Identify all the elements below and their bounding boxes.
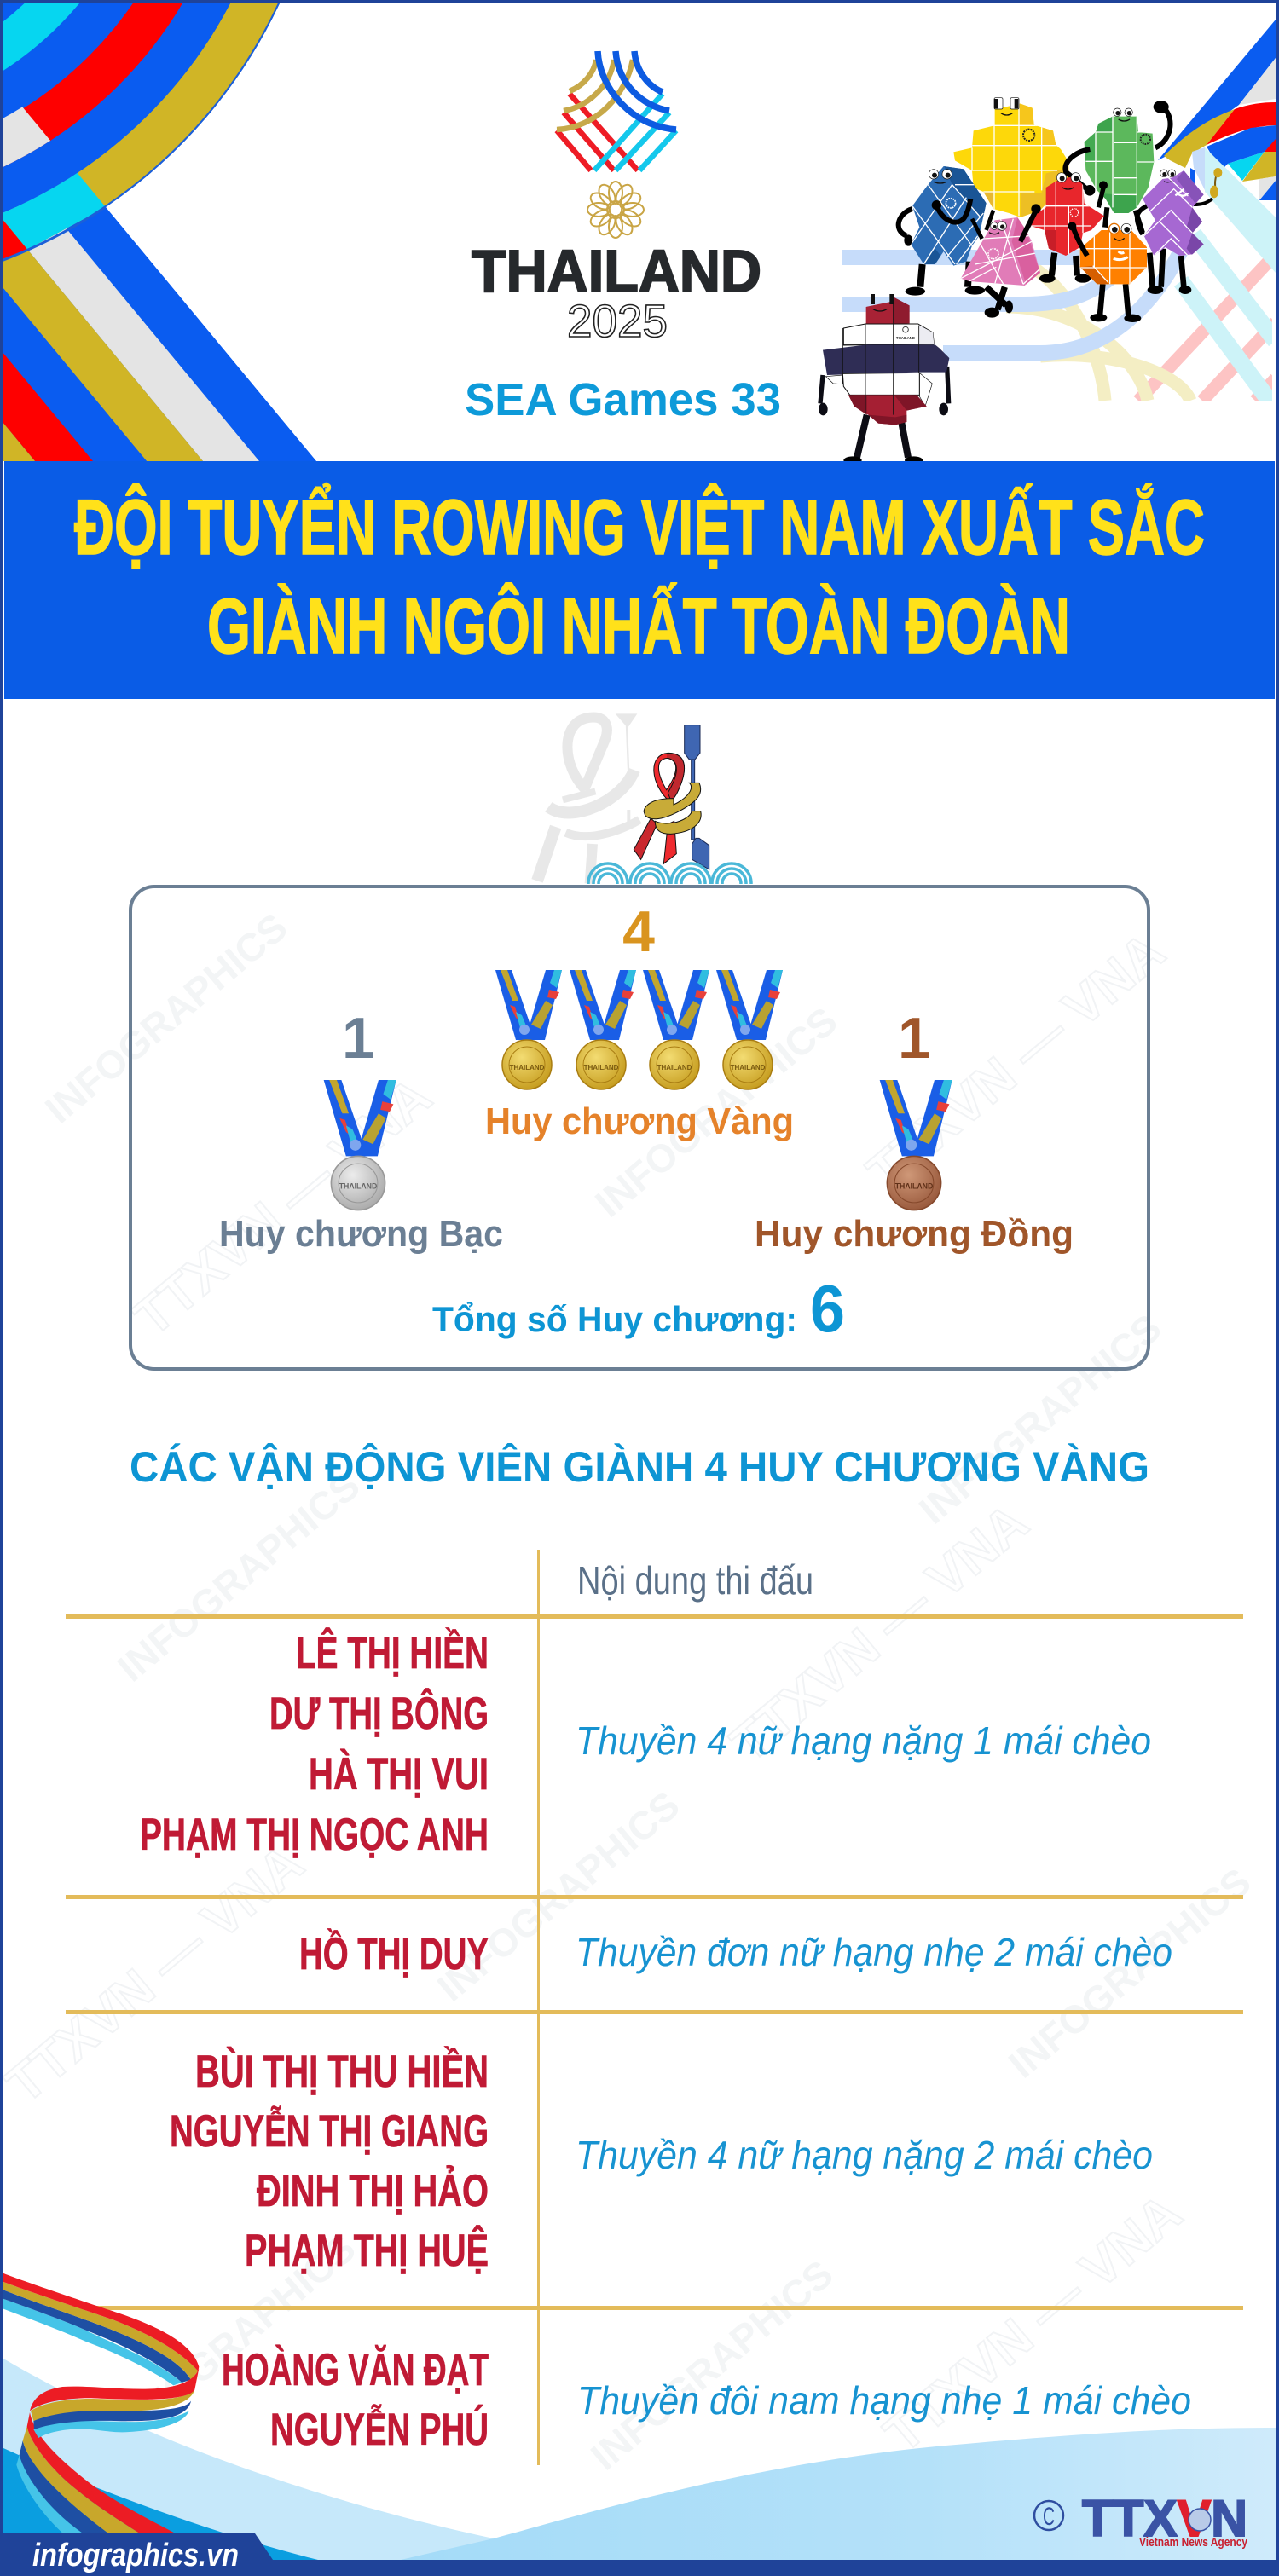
silver medal [324,1080,396,1210]
ribbon upper section [3,2273,199,2385]
logo year: 2025 [567,296,668,347]
row 1 names: DƯ THỊ BÔNG [269,1687,489,1739]
flag white top [843,324,934,345]
table header: Nội dung thi đấu [577,1558,813,1603]
watermarks: INFOGRAPHICS [109,1463,368,1690]
header graphic: arcs top right [1158,20,1276,273]
row 4 names: HOÀNG VĂN ĐẠT [222,2344,489,2395]
gold medal 1: THAILAND [510,1064,545,1071]
logo: Thailand 2025 [472,51,761,347]
oar [685,725,709,869]
total medals [432,1271,845,1346]
row 4 names: NGUYỄN PHÚ [270,2403,489,2455]
bronze medal: THAILAND [895,1182,933,1191]
bronze label: Huy chương Đồng [755,1213,1074,1255]
table rules [66,1550,1243,2465]
row 1 names: PHẠM THỊ NGỌC ANH [140,1810,489,1860]
icon: rowing ribbon and oar [588,725,751,903]
watermarks: INFOGRAPHICS [587,998,846,1226]
watermarks: INFOGRAPHICS [1000,1859,1259,2087]
panel: medal tally [130,887,1149,1369]
row 3 names: ĐINH THỊ HẢO [257,2165,489,2216]
logo lotus medallion [587,182,644,238]
copyright mark: C [1043,2503,1055,2531]
flag navy band [823,344,949,375]
row 3 names: NGUYỄN THỊ GIANG [170,2105,489,2157]
row 2 name: HỒ THỊ DUY [299,1928,489,1979]
total medals: 6 [810,1271,845,1346]
mascot: orange [1068,222,1147,322]
gold medal 3 [643,970,709,1089]
silver count: 1 [342,1006,374,1071]
silver medal: THAILAND [339,1182,377,1191]
copyright mark [1034,2501,1063,2531]
gold medal 2 [570,970,636,1089]
watermarks: TTXVN — VNA [721,1493,1039,1774]
watermarks: TTXVN — VNA [857,921,1176,1203]
gold medal 4 [716,970,783,1089]
flag head [866,294,910,325]
header graphic: pale lines behind mascots [842,234,1276,409]
ribbon back section [30,2368,199,2438]
total medals: Tổng số Huy chương: [432,1299,797,1339]
watermarks: TTXVN — VNA [124,1066,443,1348]
mascot: green [1085,101,1171,233]
logo wordmark: THAILAND [472,238,761,304]
bronze count: 1 [898,1006,930,1071]
gold medal 2: THAILAND [584,1064,619,1071]
gold medal 4: THAILAND [731,1064,766,1071]
watermarks: INFOGRAPHICS [37,904,296,1132]
mascot: Thailand flag [819,294,949,465]
TTXVN wordmark: TTXVN [1082,2490,1247,2547]
row 3 names [170,2046,489,2276]
heading: athletes: CÁC VẬN ĐỘNG VIÊN GIÀNH 4 HUY CHƯƠNG VÀNG [130,1442,1149,1491]
silver label: Huy chương Bạc [219,1213,503,1255]
bottom background waves [3,2359,1276,2560]
mascot: red [1026,149,1108,283]
row 2 event: Thuyền đơn nữ hạng nhẹ 2 mái chèo [576,1930,1172,1974]
waves [587,862,753,884]
mascot: blue [899,165,989,296]
row 1 names [140,1626,489,1860]
decorative ribbon [3,2273,199,2533]
gold medal 3: THAILAND [657,1064,692,1071]
footer bar [0,2533,1279,2576]
header graphic: woven stripes top left [0,0,341,465]
mascot: yellow [953,98,1068,219]
flag lower white [825,373,932,407]
mascots group [899,98,1222,322]
flag white top: THAILAND [896,336,915,340]
watermarks: INFOGRAPHICS [911,1305,1170,1533]
row 4 event: Thuyền đôi nam hạng nhẹ 1 mái chèo [577,2378,1191,2423]
table [66,1550,1243,2465]
mascot: purple [1137,168,1222,294]
watermarks [0,904,1259,2479]
watermarks: INFOGRAPHICS [429,1782,688,2010]
bronze medal [880,1080,952,1210]
agency name: Vietnam News Agency [1139,2535,1248,2550]
logo: TTXVN [1034,2490,1248,2550]
ribbon [634,753,701,863]
footer source text: infographics.vn [32,2538,239,2573]
row 1 event: Thuyền 4 nữ hạng nặng 1 mái chèo [576,1718,1151,1763]
logo roof emblem [557,51,676,170]
flag red bottom [848,395,927,425]
title band [4,461,1275,699]
ribbon lower section [16,2412,175,2533]
watermarks: TTXVN — VNA [0,1834,315,2115]
watermarks: TTXVN — VNA [874,2183,1193,2464]
globe [1189,2509,1211,2531]
row 1 names: LÊ THỊ HIỀN [296,1626,489,1678]
icon: rowing ghost ribbon [537,713,640,884]
row 3 event: Thuyền 4 nữ hạng nặng 2 mái chèo [576,2133,1153,2177]
row 3 names: PHẠM THỊ HUỆ [245,2224,489,2276]
gold count: 4 [622,899,655,964]
row 3 names: BÙI THỊ THU HIỀN [195,2046,489,2097]
row 1 names: HÀ THỊ VUI [309,1748,489,1799]
mascot: pink [961,204,1041,318]
gold medal 1 [495,970,562,1089]
row 4 names [222,2344,489,2455]
gold label: Huy chương Vàng [485,1100,794,1142]
watermarks: INFOGRAPHICS [582,2251,842,2479]
subtitle: SEA Games 33: SEA Games 33 [465,374,781,425]
watermarks: INFOGRAPHICS [105,2226,364,2453]
